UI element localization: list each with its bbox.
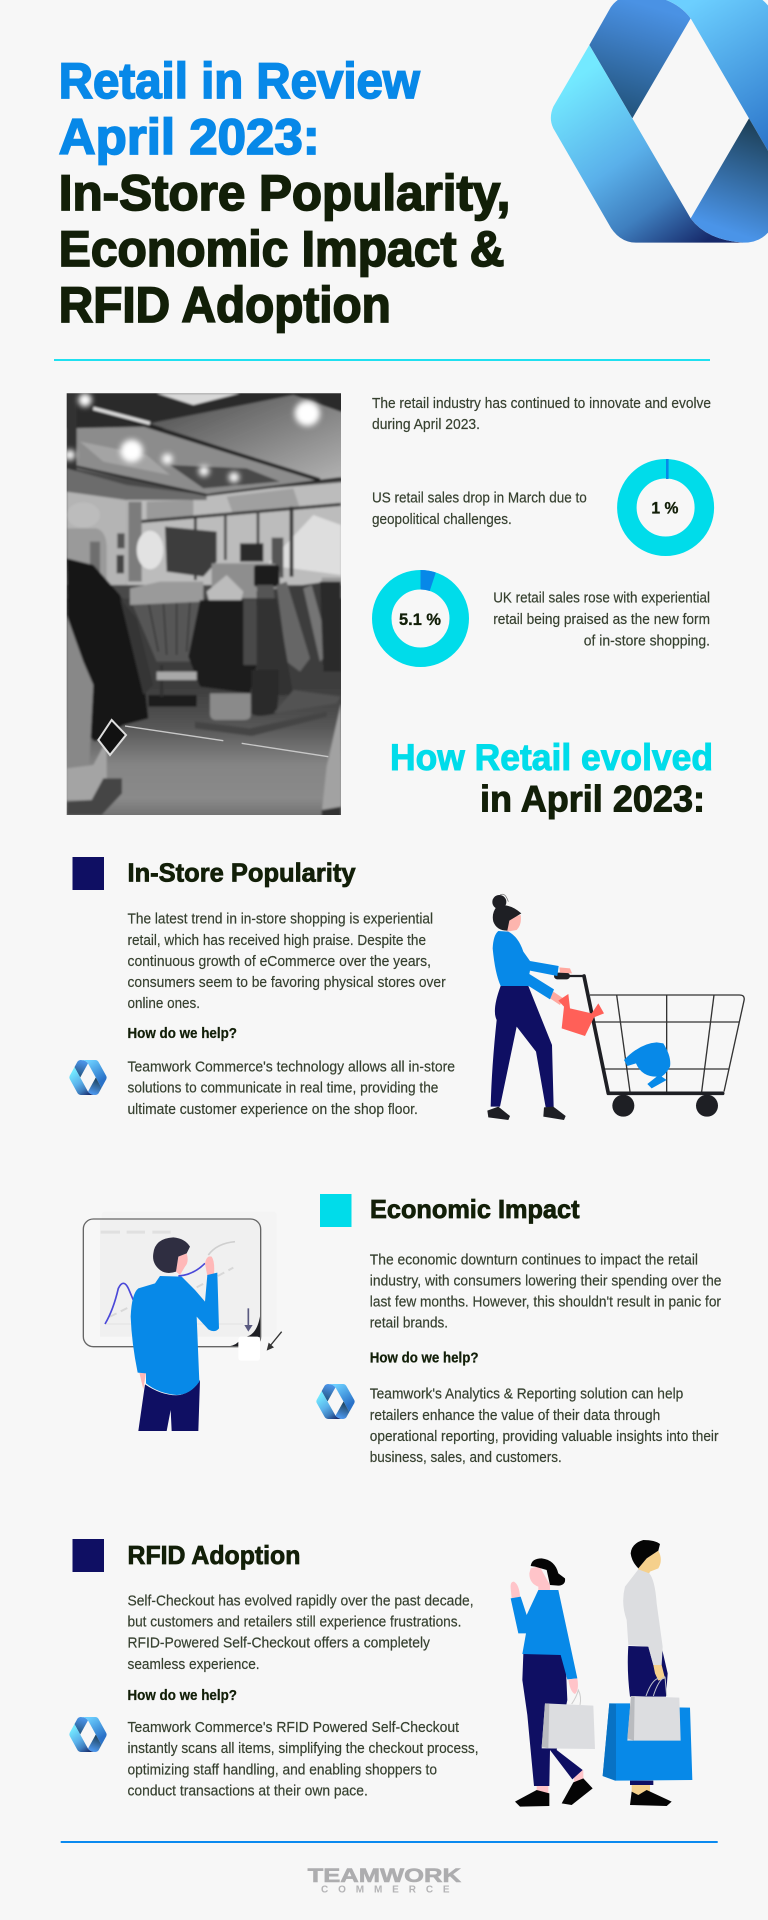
- footer logo: [308, 1865, 461, 1896]
- heading: RFID Adoption: [128, 1540, 300, 1570]
- marker square: [72, 1539, 104, 1572]
- body text: consumers seem to be favoring physical stores over: [128, 975, 446, 991]
- text: UK retail sales: of in-store shopping.: [584, 634, 710, 650]
- chart: donut 1 percent: [627, 459, 704, 546]
- help text: retailers enhance the value of their data through: [370, 1408, 660, 1424]
- help text: operational reporting, providing valuable insights into their: [370, 1429, 719, 1445]
- body text: [128, 911, 446, 1012]
- panel: rfid adoption: [69, 1539, 478, 1799]
- body text: The economic downturn continues to impact the retail: [370, 1252, 698, 1268]
- body text: Self-Checkout has evolved rapidly over the past decade,: [128, 1593, 474, 1609]
- illustration: man at chart board: [83, 1212, 282, 1431]
- body text: but customers and retailers still experience frustrations.: [128, 1614, 461, 1630]
- subheading: How do we help?: [128, 1688, 237, 1704]
- icon: large brand logo: [551, 0, 768, 243]
- marker square: [72, 857, 104, 890]
- title: Economic Impact &: [59, 221, 505, 277]
- title: Retail in Review: [59, 53, 420, 109]
- icon: small logo: [316, 1384, 355, 1419]
- panel: economic impact: [316, 1194, 722, 1466]
- title: In-Store Popularity,: [59, 165, 510, 221]
- body text: seamless experience.: [128, 1657, 260, 1673]
- intro text: [372, 396, 711, 433]
- chart: donut 1 percent: 1 %: [651, 498, 678, 518]
- intro text: The retail industry has continued to innovate and evolve: [372, 396, 711, 412]
- help text: instantly scans all items, simplifying the checkout process,: [128, 1741, 478, 1757]
- text: US retail sales: [372, 491, 587, 528]
- text: UK retail sales: [493, 591, 710, 650]
- body text: online ones.: [128, 996, 200, 1012]
- heading: Economic Impact: [370, 1194, 580, 1224]
- body text: The latest trend in in-store shopping is experiential: [128, 911, 433, 927]
- text: US retail sales: geopolitical challenges.: [372, 512, 512, 528]
- text: UK retail sales: retail being praised as the new form: [493, 612, 710, 628]
- title: [59, 53, 510, 333]
- body text: [370, 1252, 722, 1332]
- chart: donut 5.1 percent: [382, 570, 459, 657]
- intro text: during April 2023.: [372, 417, 480, 433]
- help text: [370, 1387, 719, 1466]
- help text: conduct transactions at their own pace.: [128, 1783, 368, 1799]
- help text: Teamwork Commerce's technology allows all in-store: [128, 1060, 455, 1076]
- photo: clothing store in black and white: [60, 385, 350, 818]
- heading: how retail evolved: How Retail evolved: [390, 737, 713, 778]
- illustration: woman pushing cart: [487, 894, 744, 1120]
- heading: how retail evolved: [390, 737, 713, 820]
- help text: [128, 1720, 478, 1799]
- heading: In-Store Popularity: [128, 858, 356, 888]
- title: RFID Adoption: [59, 277, 391, 333]
- help text: Teamwork Commerce's RFID Powered Self-Checkout: [128, 1720, 459, 1736]
- body text: industry, with consumers lowering their spending over the: [370, 1274, 722, 1290]
- text: US retail sales: US retail sales drop in March due to: [372, 491, 587, 507]
- help text: Teamwork's Analytics & Reporting solution can help: [370, 1387, 683, 1403]
- body text: retail, which has received high praise. Despite the: [128, 933, 426, 949]
- body text: retail brands.: [370, 1316, 448, 1332]
- icon: small logo: [69, 1717, 107, 1752]
- body text: [128, 1593, 474, 1673]
- icon: small logo: [69, 1060, 107, 1095]
- help text: [128, 1060, 455, 1118]
- illustration: two shoppers with bags: [511, 1540, 692, 1807]
- help text: business, sales, and customers.: [370, 1450, 562, 1466]
- footer logo: COMMERCE: [321, 1884, 450, 1896]
- help text: solutions to communicate in real time, providing the: [128, 1081, 438, 1097]
- help text: ultimate customer experience on the shop floor.: [128, 1102, 418, 1118]
- help text: optimizing staff handling, and enabling shoppers to: [128, 1762, 437, 1778]
- subheading: How do we help?: [128, 1026, 237, 1042]
- marker square: [320, 1194, 352, 1227]
- panel: in-store popularity: [69, 857, 455, 1118]
- title: April 2023:: [59, 109, 320, 165]
- chart: donut 5.1 percent: 5.1 %: [399, 610, 441, 629]
- body text: last few months. However, this shouldn't result in panic for: [370, 1295, 721, 1311]
- heading: how retail evolved: in April 2023:: [480, 779, 705, 820]
- text: UK retail sales: UK retail sales rose with experiential: [493, 591, 710, 607]
- subheading: How do we help?: [370, 1351, 479, 1367]
- body text: continuous growth of eCommerce over the years,: [128, 954, 431, 970]
- body text: RFID-Powered Self-Checkout offers a completely: [128, 1636, 431, 1652]
- footer logo: TEAMWORK: [308, 1865, 461, 1887]
